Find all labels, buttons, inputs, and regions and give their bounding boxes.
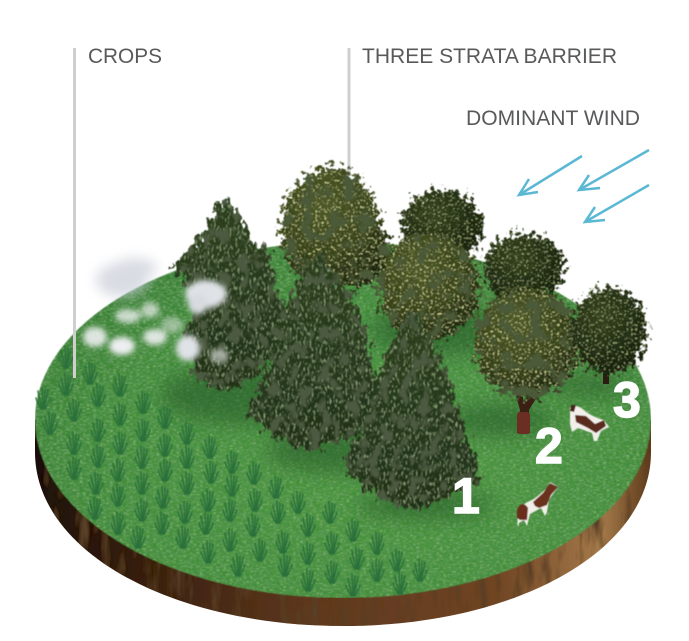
arrow 2: [579, 150, 649, 190]
tree: far right broadleaf: [571, 288, 647, 374]
number 3: 3: [613, 372, 641, 428]
wind arrows: [519, 150, 649, 222]
back cloud: [96, 258, 157, 297]
ground shading under trees: [160, 305, 630, 519]
cow near 3: [570, 405, 609, 441]
label: crops: CROPS: [88, 45, 162, 68]
tree: back conifer: [172, 196, 290, 392]
tree: back broadleaf 2: [401, 190, 483, 262]
trunk: front broadleaf: [516, 392, 540, 434]
disc soil side: [35, 420, 651, 626]
crops: [36, 346, 427, 596]
front clouds: [83, 280, 228, 363]
number 1: 1: [452, 468, 480, 524]
label: dominant wind: DOMINANT WIND: [466, 107, 640, 130]
tree: mid broadleaf: [378, 233, 480, 341]
arrow 3: [585, 185, 649, 222]
disc grass top: [35, 242, 651, 598]
tree: middle conifer: [248, 250, 388, 452]
label: three strata barrier: THREE STRATA BARRIER: [362, 45, 617, 68]
cow near 1: [517, 482, 558, 527]
tree: front conifer: [342, 308, 482, 510]
line: crops leader: [73, 48, 76, 378]
tree: back broadleaf 1: [281, 166, 389, 288]
number 2: 2: [535, 418, 563, 474]
tree: front broadleaf: [474, 287, 580, 399]
trunk: far right tree: [603, 360, 609, 384]
tree: back broadleaf 3: [484, 233, 564, 303]
line: barrier leader: [348, 48, 350, 173]
arrow 1: [519, 156, 582, 195]
